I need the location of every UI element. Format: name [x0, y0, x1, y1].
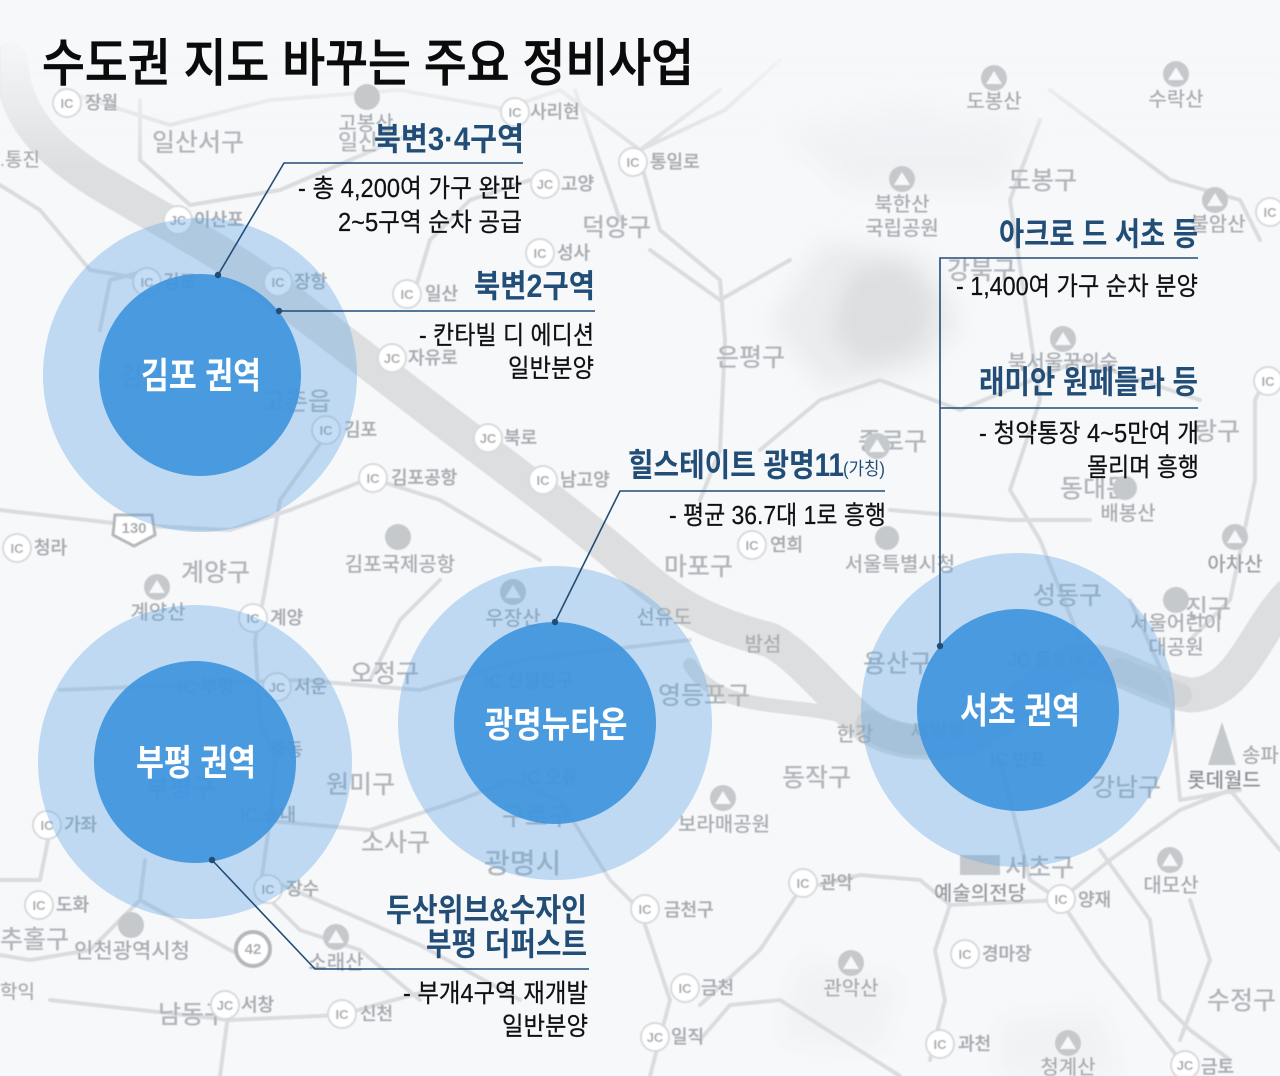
map labels: 대공원 [1148, 636, 1204, 659]
zone: 부평 권역: 부평 권역 [136, 742, 256, 783]
map labels: 밤섬 [745, 633, 781, 656]
interchange labels: 장월 [85, 93, 118, 113]
map labels: 소사구 [361, 829, 430, 857]
interchange labels: IC [366, 471, 380, 486]
interchange labels: 통일로 [650, 152, 700, 172]
top fade [0, 0, 1280, 170]
map labels: 랑구 [1194, 418, 1240, 446]
callout: 북변3·4구역: 북변3·4구역 [374, 121, 524, 157]
interchange labels: IC [536, 473, 550, 488]
map labels: 동작구 [782, 764, 851, 792]
interchange labels: 42 [245, 941, 261, 958]
map labels: .통진 [0, 149, 40, 171]
map labels: 수정구 [1207, 987, 1276, 1015]
title: 수도권 지도 바꾸는 주요 정비사업 [42, 35, 694, 92]
interchange labels: 양재 [1078, 890, 1111, 910]
interchange labels: 관악 [820, 873, 853, 893]
map labels: 서초구 [1005, 854, 1074, 882]
interchange labels: JC [384, 351, 401, 366]
map labels: 북한산 [874, 193, 930, 216]
map labels: 국립공원 [865, 217, 939, 240]
map labels: 성동구 [1033, 582, 1102, 610]
interchange labels: 남고양 [560, 470, 610, 490]
interchange labels: IC [1264, 205, 1277, 220]
interchange labels: IC [336, 1007, 349, 1022]
interchange labels: IC [1262, 374, 1275, 389]
interchange labels: IC [626, 155, 640, 170]
map labels: 롯데월드 [1187, 769, 1261, 792]
map labels: 동대문 [1060, 475, 1129, 503]
interchange labels: IC [958, 947, 972, 962]
callout: 북변2구역: 일반분양 [508, 355, 594, 383]
interchange labels: IC [638, 902, 652, 917]
interchange labels: 계양 [270, 608, 303, 628]
callout: 두산위브&수자인 부평 더퍼스트: 일반분양 [502, 1013, 588, 1041]
map labels: 도봉구 [1008, 167, 1077, 195]
interchange labels: 자유로 [408, 348, 458, 368]
map labels: 예술의전당 [934, 882, 1026, 905]
callout: 북변2구역: - 칸타빌 디 에디션 [419, 322, 594, 350]
interchange labels: JC [1177, 1058, 1194, 1073]
zone: 광명뉴타운 [398, 566, 712, 880]
interchange labels: JC 동호대교 [1008, 650, 1101, 670]
interchange labels: 고양 [561, 174, 594, 194]
map labels: 대모산 [1143, 874, 1199, 897]
interchange labels: IC 오류 [522, 768, 578, 788]
interchange labels: IC [678, 981, 692, 996]
callout: 두산위브&수자인 부평 더퍼스트 [209, 857, 589, 1041]
zone: 부평 권역 [38, 605, 352, 919]
callout: 아크로 드 서초 등: - 1,400여 가구 순차 분양 [956, 273, 1198, 301]
interchange labels: 금천 [701, 978, 734, 998]
interchange labels: 이산포 [194, 210, 244, 230]
interchange labels: 서운 [294, 677, 327, 697]
callout: 래미안 원페를라 등: - 청약통장 4~5만여 개 [979, 420, 1199, 448]
interchange labels: IC [746, 538, 759, 553]
map labels: 세빛섬 [910, 720, 966, 743]
map labels: 배봉산 [1100, 502, 1156, 525]
map labels: 한강 [837, 723, 873, 746]
map labels: 부평구 [146, 775, 215, 803]
interchange labels: 일직 [671, 1027, 704, 1047]
map labels: 은평구 [716, 344, 785, 372]
map labels: 광명시 [484, 848, 561, 879]
interchange labels: 장수 [286, 879, 319, 899]
callout: 힐스테이트 광명11: 힐스테이트 광명11 [628, 447, 844, 483]
interchange labels: IC [246, 611, 260, 626]
zone: 서초 권역 [861, 553, 1175, 867]
interchange labels: 과천 [958, 1034, 991, 1054]
interchange labels: IC [140, 275, 154, 290]
interchange labels: 중동 [270, 740, 303, 760]
map labels: 인천광역시청 [74, 940, 190, 963]
map labels: 원미구 [326, 771, 395, 799]
interchange labels: 장항 [294, 272, 327, 292]
interchange labels: JC [269, 680, 286, 695]
interchange labels: 신천 [360, 1004, 393, 1024]
map labels: 김포 [120, 363, 166, 391]
interchange labels: JC [647, 1030, 664, 1045]
interchange labels: IC [508, 105, 522, 120]
map labels: 계양구 [181, 559, 250, 587]
map labels: 수락산 [1148, 88, 1204, 111]
map labels: 학익 [0, 981, 35, 1003]
interchange labels: 가좌 [64, 815, 98, 835]
zone: 김포 권역 [43, 218, 357, 532]
map labels: 종로구 [858, 428, 927, 456]
map labels: 우장산 [485, 607, 541, 630]
interchange labels: 성사 [557, 243, 591, 263]
interchange labels: IC [60, 96, 74, 111]
map labels: 덕양구 [582, 214, 651, 242]
interchange labels: 도화 [56, 895, 90, 915]
map labels: 북서울꿈의숲 [1008, 351, 1118, 374]
map labels: 남동구 [158, 1001, 227, 1029]
map labels: 계양산 [130, 601, 186, 624]
map labels: 강북구 [947, 257, 1016, 285]
interchange labels: 김포공항 [391, 468, 457, 488]
interchange labels: 금천구 [664, 900, 714, 920]
zone: 광명뉴타운: 광명뉴타운 [484, 704, 628, 745]
interchange labels: 130 [121, 520, 147, 537]
map labels: 강남구 [1092, 774, 1161, 802]
interchange labels: JC [537, 177, 554, 192]
interchange labels: 사리현 [530, 102, 580, 122]
map labels: 관악산 [823, 977, 879, 1000]
callout: 두산위브&수자인 부평 더퍼스트: - 부개4구역 재개발 [403, 980, 588, 1008]
map labels: 고촌읍 [262, 388, 331, 416]
callout: 북변3·4구역: 2~5구역 순차 공급 [338, 209, 522, 237]
callout: 북변2구역: 북변2구역 [474, 268, 595, 304]
map labels: 마포구 [664, 553, 733, 581]
map labels: 도봉산 [966, 90, 1022, 113]
map labels: 용산구 [863, 650, 932, 678]
interchange labels: JC [480, 431, 497, 446]
interchange labels: IC [934, 1037, 947, 1052]
map labels: 일산서구 [152, 129, 244, 157]
interchange labels: 서창 [241, 995, 274, 1015]
callout: 북변2구역 [276, 268, 595, 383]
map labels: 김포국제공항 [345, 553, 455, 576]
map labels: 소래산 [308, 951, 364, 974]
callout: 래미안 원페를라 등: 몰리며 흥행 [1087, 454, 1199, 482]
interchange labels: IC [796, 876, 810, 891]
interchange labels: 경마장 [982, 944, 1032, 964]
map labels: 추홀구 [0, 926, 69, 954]
callout: 힐스테이트 광명11: (가칭) [843, 459, 885, 479]
interchange labels: IC [272, 275, 285, 290]
interchange labels: 연희 [770, 535, 803, 555]
map labels: 불암산 [1190, 213, 1246, 236]
map labels: 송파 [1242, 744, 1279, 767]
interchange labels: IC [1054, 892, 1068, 907]
map labels: 오정구 [350, 660, 419, 688]
zone: 김포 권역: 김포 권역 [141, 355, 261, 396]
interchange labels: 김포 [344, 420, 377, 440]
callout: 힐스테이트 광명11: - 평균 36.7대 1로 흥행 [669, 502, 886, 530]
interchange labels: IC [10, 541, 24, 556]
interchange labels: IC 부평 [178, 677, 234, 697]
zone: 서초 권역: 서초 권역 [960, 690, 1080, 731]
interchange labels: IC [40, 818, 54, 833]
callout: 두산위브&수자인 부평 더퍼스트: 두산위브&수자인 [386, 892, 587, 928]
interchange labels: IC 송내 [240, 805, 296, 825]
interchange labels: IC [32, 898, 46, 913]
interchange labels: IC 반포 [990, 750, 1046, 770]
interchange labels: IC [534, 246, 547, 261]
map labels: 보라매공원 [678, 813, 770, 836]
interchange labels: JC [217, 998, 234, 1013]
callout: 래미안 원페를라 등 [940, 364, 1199, 482]
map labels: 선유도 [636, 606, 692, 629]
map labels: 아차산 [1207, 553, 1263, 576]
map labels: 영등포구 [658, 682, 750, 710]
callout: 북변3·4구역: - 총 4,200여 가구 완판 [298, 175, 522, 203]
interchange labels: 북로 [504, 428, 537, 448]
callout: 아크로 드 서초 등: 아크로 드 서초 등 [999, 216, 1198, 252]
interchange labels: IC [320, 423, 333, 438]
map labels: 구로구 [502, 803, 571, 831]
callout: 힐스테이트 광명11 [552, 447, 886, 625]
interchange labels: 일산 [425, 284, 458, 304]
interchange labels: IC 신월천구 [484, 671, 573, 691]
interchange labels: 청라 [34, 538, 68, 558]
map labels: 서울어린이 [1130, 612, 1222, 635]
map labels: 서울특별시청 [845, 553, 955, 576]
callout: 두산위브&수자인 부평 더퍼스트: 부평 더퍼스트 [426, 926, 587, 962]
map labels: 진구 [1185, 595, 1231, 623]
interchange labels: IC [400, 287, 414, 302]
map labels: 고봉산 [338, 112, 394, 135]
callout: 래미안 원페를라 등: 래미안 원페를라 등 [979, 364, 1198, 400]
interchange labels: 김포 [163, 272, 196, 292]
map labels: 일산 [338, 130, 378, 155]
mountain shading [770, 100, 1120, 1076]
river [10, 60, 1280, 742]
interchange labels: IC [262, 882, 275, 897]
callout: 아크로 드 서초 등 [937, 216, 1198, 649]
interchange labels: JC [170, 213, 187, 228]
callout: 북변3·4구역 [215, 121, 524, 278]
